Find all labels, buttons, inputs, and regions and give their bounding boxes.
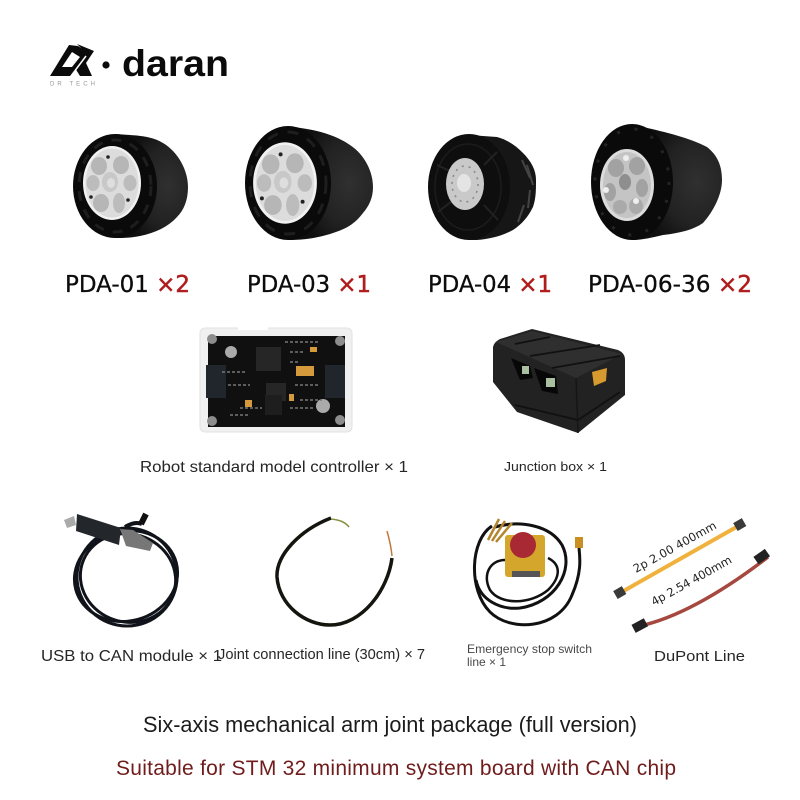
- product: PDA-06-36 motor: [591, 124, 722, 240]
- label: DuPont Line: DuPont Line: [654, 648, 745, 665]
- product: DuPont lines: [613, 518, 770, 633]
- product: robot controller board: [200, 326, 352, 432]
- label: joint connection line: Joint connection line (30cm) × 7: [218, 646, 425, 663]
- product: DuPont lines: 2p 2.00 400mm: [631, 518, 719, 576]
- product: DuPont lines: 4p 2.54 400mm: [649, 553, 734, 609]
- label: PDA-04 x1: PDA-04 ×1: [428, 272, 552, 298]
- label: PDA-06-36 x2: PDA-06-36 ×2: [588, 272, 752, 298]
- label: emergency stop switch: line × 1: [467, 655, 506, 669]
- product: PDA-03 motor: [245, 126, 373, 240]
- product: joint connection line: [277, 518, 392, 625]
- subheading: compatibility note: Suitable for STM 32 minimum system board with CAN chip: [116, 757, 676, 780]
- product: PDA-01 motor: [73, 134, 188, 238]
- label: controller: Robot standard model controller × 1: [140, 459, 408, 476]
- label: junction box: Junction box × 1: [504, 459, 607, 474]
- product: PDA-04 motor: [428, 134, 536, 240]
- label: PDA-01 x2: PDA-01 ×2: [65, 272, 190, 298]
- label: PDA-03 x1: PDA-03 ×1: [247, 272, 371, 298]
- label: USB to CAN: USB to CAN module × 1: [41, 648, 222, 665]
- label: emergency stop switch: Emergency stop switch: [467, 642, 592, 656]
- product: junction box: [493, 329, 625, 433]
- logo: DR mark and daran wordmark: [50, 43, 229, 88]
- logo: DR mark and daran wordmark: daran: [122, 43, 229, 84]
- product: emergency stop switch: [474, 519, 583, 625]
- product: USB to CAN module: [64, 514, 188, 635]
- logo: DR mark and daran wordmark: DR TECH: [50, 82, 95, 88]
- heading: package title: Six-axis mechanical arm joint package (full version): [143, 712, 637, 737]
